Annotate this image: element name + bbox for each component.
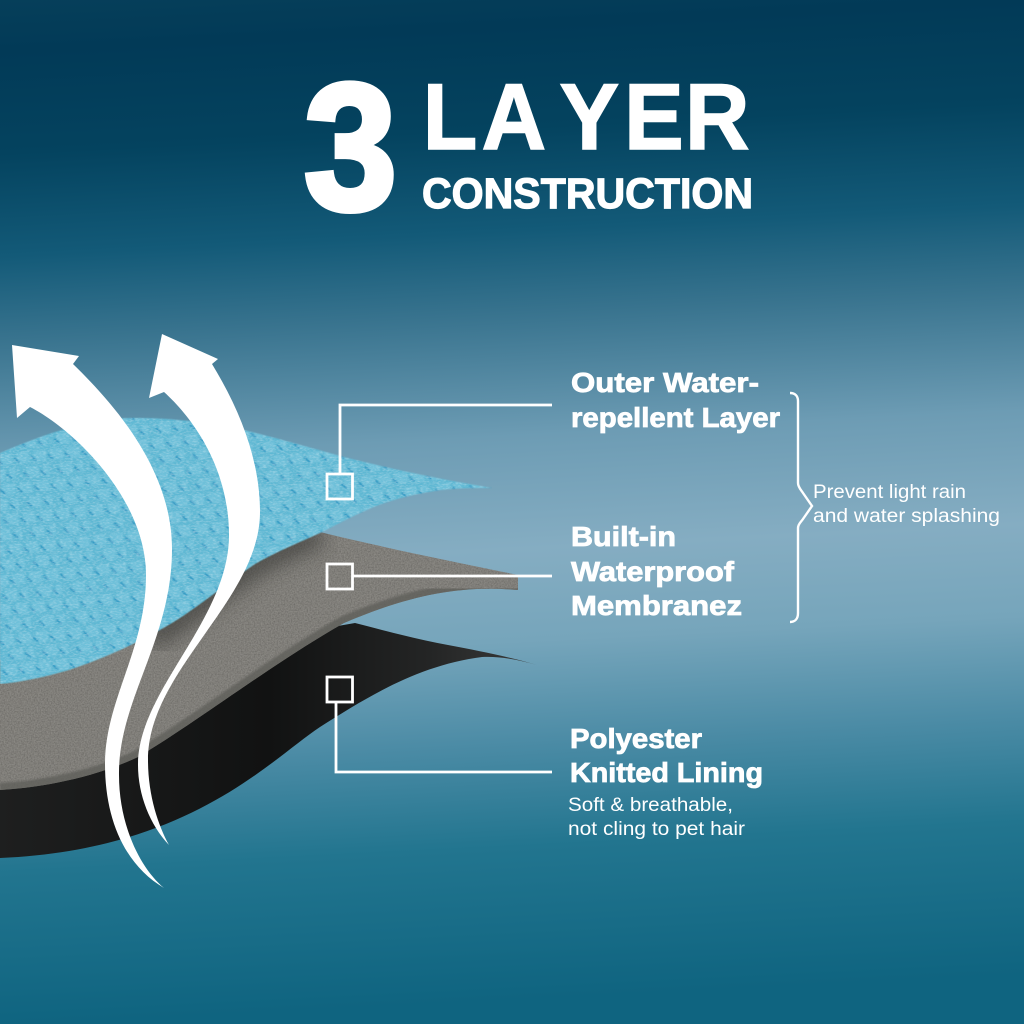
title: [304, 47, 753, 248]
icon: breathability arrow left: [12, 345, 172, 888]
layer: black lining: [0, 623, 537, 858]
callout: outer layer connector: [327, 405, 552, 499]
note: prevent light rain: and water splashing: [813, 506, 1000, 527]
icon: breathability arrow right: [138, 334, 260, 845]
label: built-in waterproof membrane: [571, 521, 742, 621]
label: outer water-repellent layer: Outer Water-: [571, 367, 759, 398]
word LAYER: LAYER: [423, 65, 749, 170]
note: prevent light rain: [813, 482, 1000, 527]
label: polyester knitted lining: [570, 723, 763, 788]
numeral 3: 3: [304, 47, 397, 248]
label: built-in waterproof membrane: Membranez: [571, 590, 742, 621]
label: polyester knitted lining: Polyester: [570, 723, 702, 754]
callout: membrane connector: [327, 564, 552, 589]
layer: blue outer fabric: [0, 418, 492, 684]
word CONSTRUCTION: CONSTRUCTION: [422, 170, 753, 218]
note: lining description: [568, 795, 746, 840]
label: built-in waterproof membrane: Waterproof: [571, 556, 735, 587]
note: lining description: not cling to pet hair: [568, 819, 746, 840]
layer: grey membrane: [0, 520, 520, 800]
label: polyester knitted lining: Knitted Lining: [570, 757, 763, 788]
callout: lining connector: [327, 677, 552, 772]
label: outer water-repellent layer: repellent Layer: [571, 402, 780, 433]
brace grouping first two layers: [790, 393, 812, 622]
label: built-in waterproof membrane: Built-in: [571, 521, 676, 552]
note: lining description: Soft & breathable,: [568, 795, 733, 816]
note: prevent light rain: Prevent light rain: [813, 482, 966, 503]
label: outer water-repellent layer: [571, 367, 780, 433]
fabric layers illustration: [0, 418, 537, 858]
